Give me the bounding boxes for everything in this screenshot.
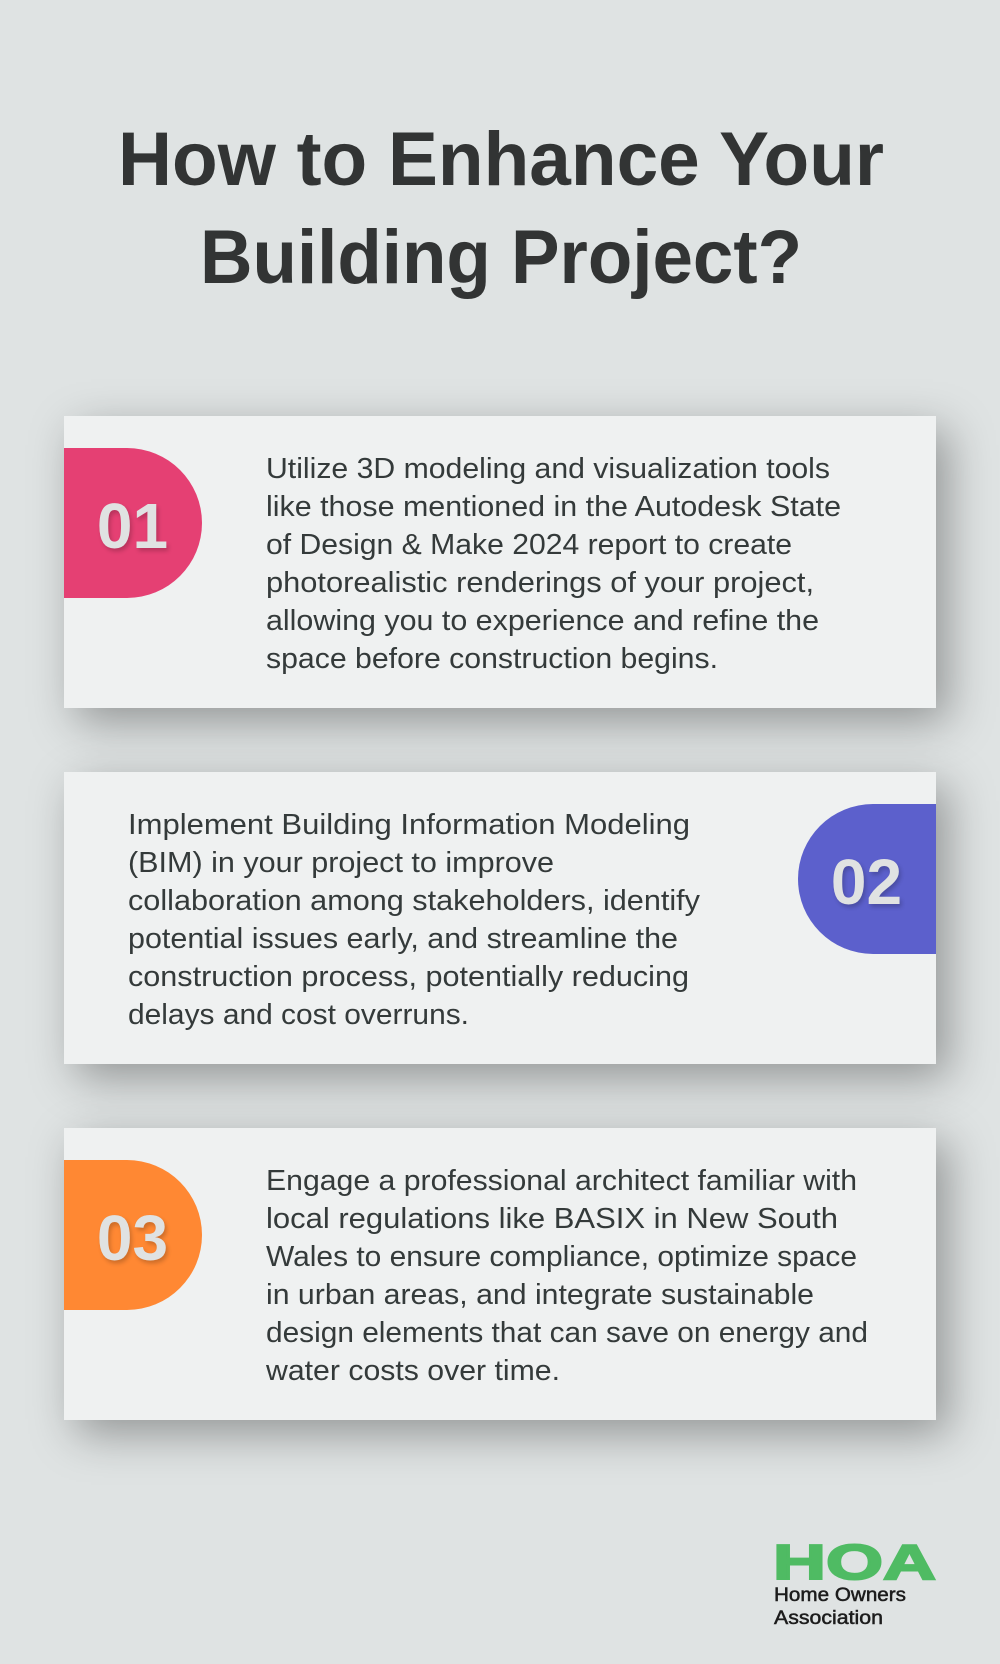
badge: 03: 03 [97,1202,168,1274]
text: step 2 description: collaboration among stakeholders, identify [128,885,701,917]
panel: step 1 [64,416,936,708]
badge: 02: 02 [831,846,902,918]
text: step 3 description: Wales to ensure compliance, optimize space [266,1241,857,1273]
panel: step 3 [64,1128,936,1420]
title [118,117,884,300]
text: step 2 description: Implement Building Information Modeling [128,809,690,841]
text: step 1 description: photorealistic renderings of your project, [266,567,814,599]
badge: 01 [64,448,202,598]
text: step 3 description: local regulations like BASIX in New South [266,1203,838,1235]
badge: 01: 01 [97,490,168,562]
title: How to Enhance Your [118,117,884,202]
text: step 3 description: Engage a professional architect familiar with [266,1165,857,1197]
text: step 1 description: space before construction begins. [266,643,718,675]
text: step 1 description: of Design & Make 2024 report to create [266,529,792,561]
logo: HOA Home Owners Association: Home Owners [774,1585,906,1606]
text: step 3 description: design elements that can save on energy and [266,1317,868,1349]
text: step 3 description: in urban areas, and integrate sustainable [266,1279,814,1311]
title: Building Project? [200,215,802,300]
text: step 1 description [266,453,841,675]
text: step 2 description: potential issues early, and streamline the [128,923,678,955]
text: step 1 description: allowing you to experience and refine the [266,605,819,637]
badge: 03 [64,1160,202,1310]
badge: 02 [798,804,936,954]
text: step 2 description: delays and cost overruns. [128,999,469,1031]
logo: HOA Home Owners Association [773,1536,936,1629]
text: step 2 description: (BIM) in your project to improve [128,847,554,879]
text: step 1 description: like those mentioned in the Autodesk State [266,491,841,523]
text: step 3 description: water costs over time. [265,1355,560,1387]
text: step 3 description [265,1165,868,1387]
text: step 1 description: Utilize 3D modeling and visualization tools [266,453,830,485]
text: step 2 description: construction process, potentially reducing [128,961,689,993]
panel: step 2 [64,772,936,1064]
logo: HOA Home Owners Association: HOA [773,1536,936,1590]
logo: HOA Home Owners Association: Association [774,1608,883,1629]
text: step 2 description [128,809,701,1031]
